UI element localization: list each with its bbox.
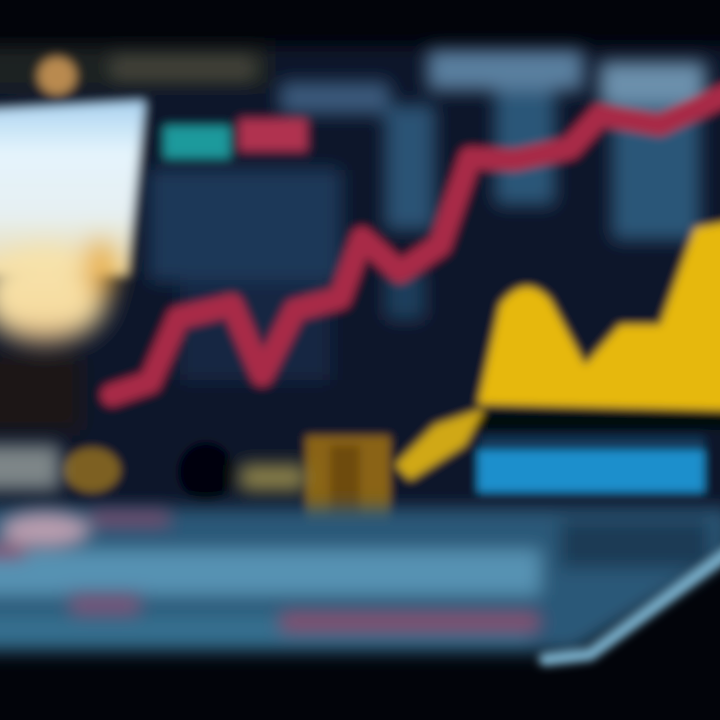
blue bar [478,450,704,492]
legend red [238,118,308,152]
left grey band [0,445,60,490]
yellow area chart [478,222,720,410]
chart columns [280,50,705,320]
keyboard surface [0,508,720,652]
legend teal [163,125,231,159]
gold cube [306,436,390,526]
brown lower block [0,355,80,430]
sun glow [0,240,114,343]
header dot icon [37,56,77,96]
dark band under area [470,412,720,430]
header text bar [110,56,255,80]
connector stroke [240,465,306,490]
left bright window [0,100,146,275]
pink keyboard highlights [0,512,540,632]
small gold cube [64,448,120,492]
screen panel [0,46,720,526]
laptop edge highlight [545,552,720,660]
yellow arrow stroke [395,408,485,480]
dark cube [178,442,234,502]
red line chart [112,95,720,395]
